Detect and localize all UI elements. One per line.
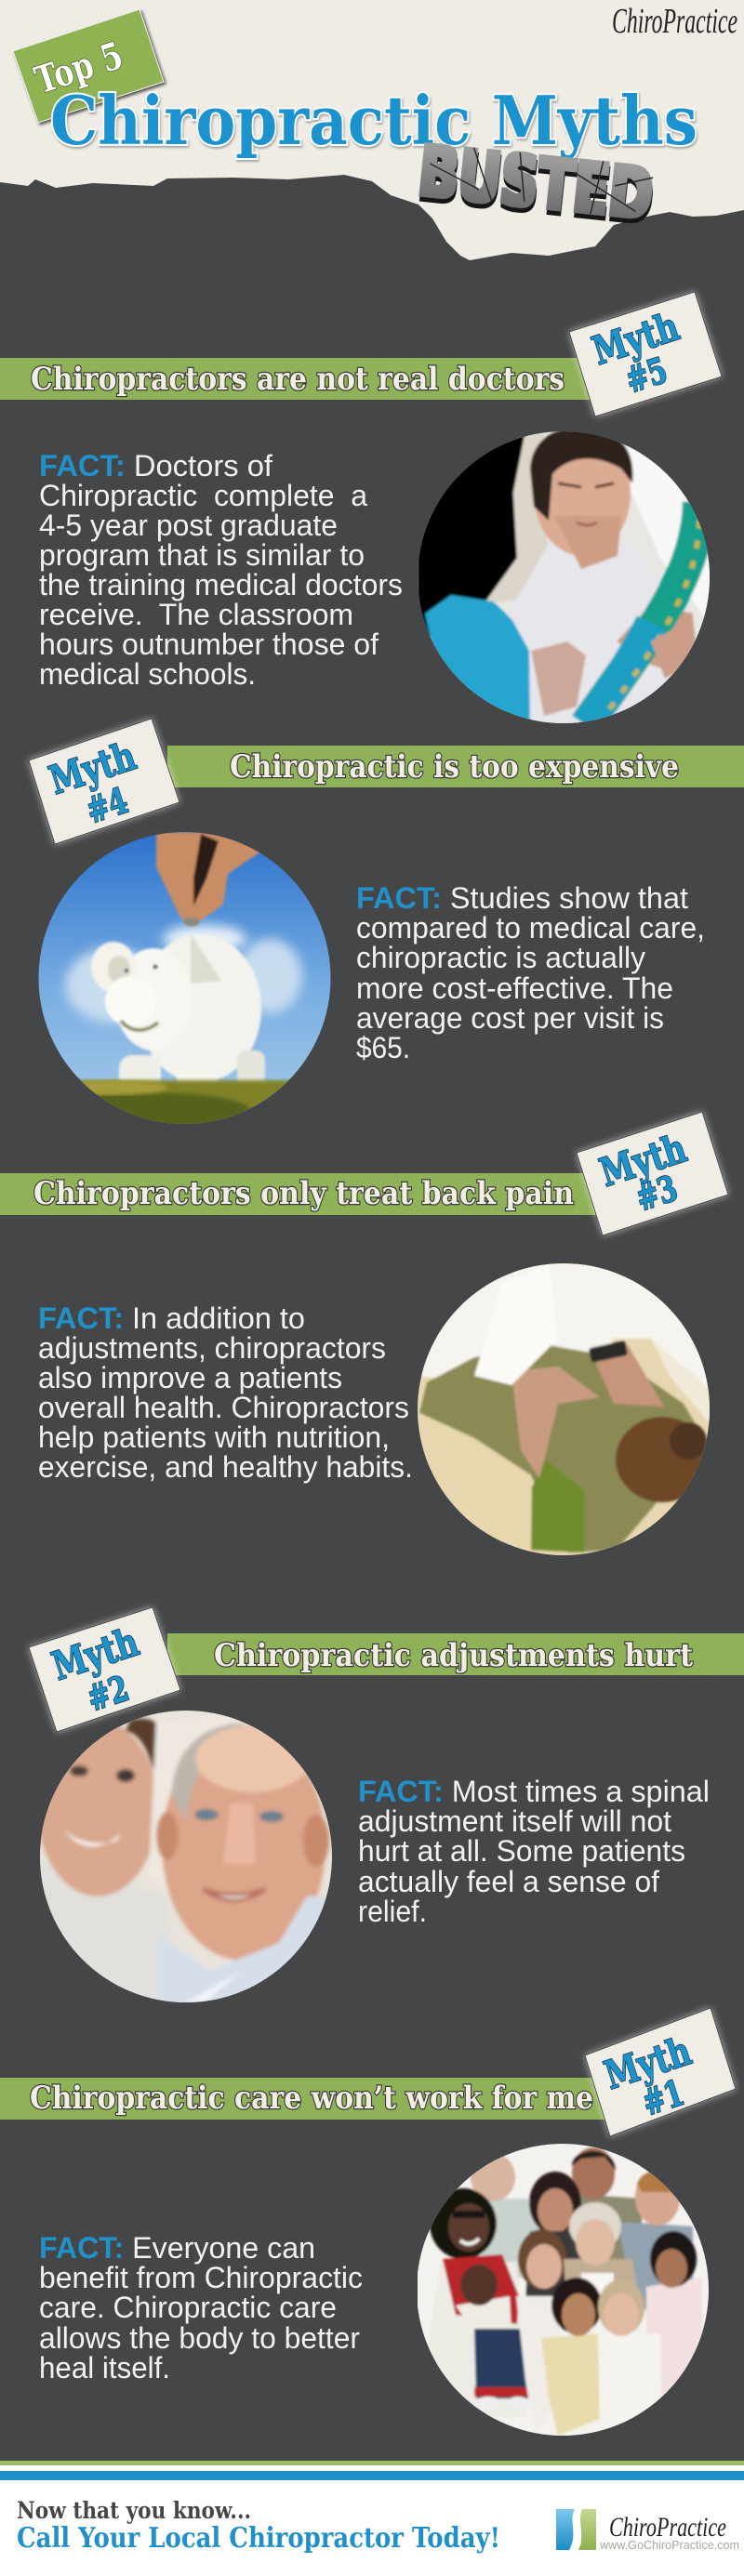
busted stamp: BUSTED [415,131,657,235]
fact text: myth 3: exercise, and healthy habits. [38,1450,413,1484]
badge: Top 5 [13,9,164,123]
footer logo: www.GoChiroPractice.com [599,2538,739,2552]
fact text: myth 4: FACT: Studies show that [356,881,688,915]
badge: Top 5: Top 5 [30,33,128,102]
logo icon [556,2509,596,2550]
fact text: myth 5: 4-5 year post graduate [39,509,338,542]
fact text: myth 1: care. Chiropractic care [39,2291,337,2324]
photo: smiling senior and daughter [37,1711,334,2002]
fact text: myth 5: receive. The classroom [39,598,353,631]
card: myth 2 [29,1607,180,1732]
fact text: myth 3: adjustments, chiropractors [38,1331,386,1365]
fact text: myth 1: benefit from Chiropractic [39,2261,363,2294]
fact text: myth 2 [358,1775,710,1928]
photo: doctor with spine model [418,429,716,725]
fact text: myth 4 [356,881,705,1064]
fact text: myth 3 [38,1301,413,1484]
card: myth 3: #3 [631,1167,683,1219]
card: myth 1 [585,2008,736,2136]
banner: myth 2: Chiropractic adjustments hurt [214,1637,693,1674]
fact text: myth 1: allows the body to better [39,2321,360,2355]
fact text: myth 3: overall health. Chiropractors [38,1391,409,1424]
fact text: myth 2: FACT: Most times a spinal [358,1775,710,1808]
card: myth 4: #4 [81,779,133,831]
banner: myth 3: Chiropractors only treat back pain [33,1175,574,1212]
footer logo [556,2509,739,2552]
card: myth 4: Myth [44,733,141,803]
photo: adjustment on patient's back [418,1263,716,1555]
card: myth 1: Myth [599,2028,697,2098]
fact text: myth 3: also improve a patients [38,1361,342,1394]
fact text: myth 4: compared to medical care, [356,911,705,945]
fact text: myth 2: actually feel a sense of [358,1865,659,1898]
card: myth 5: #5 [620,349,672,401]
fact text: myth 4: chiropractic is actually [356,941,645,974]
fact text: myth 2: adjustment itself will not [358,1804,671,1838]
fact text: myth 2: hurt at all. Some patients [358,1834,685,1868]
fact text: myth 4: average cost per visit is [356,1001,664,1035]
fact text: myth 4: more cost-effective. The [356,971,673,1005]
fact text: myth 5: the training medical doctors [39,568,403,601]
card: myth 2: #2 [82,1667,134,1719]
fact text: myth 1: FACT: Everyone can [39,2231,315,2265]
banner: myth 1: Chiropractic care won’t work for me [30,2080,593,2117]
card: myth 1: #1 [637,2071,689,2123]
fact text: myth 4: $65. [356,1031,410,1064]
fact text: myth 3: FACT: In addition to [38,1301,305,1335]
footer text: now that you know: Now that you know... [17,2497,251,2524]
fact text: myth 5 [39,449,403,691]
photo: piggy bank [38,832,332,1129]
photo: diverse group of people [418,2144,710,2436]
card: myth 3 [577,1112,728,1235]
fact text: myth 1: heal itself. [39,2351,170,2384]
fact text: myth 2: relief. [358,1895,427,1928]
fact text: myth 3: help patients with nutrition, [38,1420,390,1454]
card: myth 4 [29,719,179,844]
fact text: myth 5: hours outnumber those of [39,627,379,661]
card: myth 5: Myth [587,303,684,374]
fact text: myth 5: medical schools. [39,657,256,691]
fact text: myth 1 [39,2231,363,2384]
fact text: myth 5: program that is similar to [39,538,365,572]
footer call to action: Call Your Local Chiropractor Today! [17,2522,500,2555]
fact text: myth 5: Chiropractic complete a [39,479,367,512]
banner: myth 4: Chiropractic is too expensive [230,748,679,786]
card: myth 5 [569,292,722,416]
fact text: myth 5: FACT: Doctors of [39,449,272,482]
paper header background [0,0,744,279]
card: myth 3: Myth [594,1125,692,1196]
card: myth 2: Myth [46,1618,144,1689]
footer divider lines and white panel [0,2461,744,2576]
banner: myth 5: Chiropractors are not real doctors [31,361,565,398]
